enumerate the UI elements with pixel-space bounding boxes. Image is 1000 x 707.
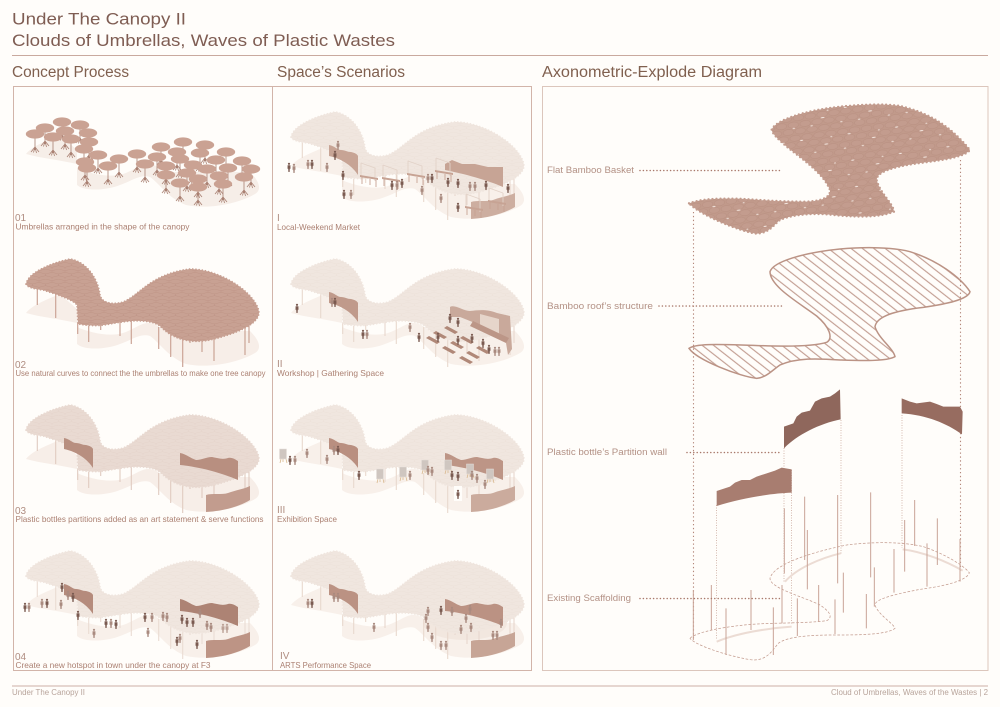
canopy with partitions xyxy=(26,405,259,513)
canopy with people xyxy=(26,551,259,659)
panel: scenarios frame xyxy=(272,86,532,670)
caption III: III xyxy=(277,505,285,516)
people xyxy=(24,583,228,649)
caption II: II xyxy=(277,359,283,370)
caption IV: ARTS Performance Space xyxy=(280,660,371,670)
caption III xyxy=(277,505,337,524)
caption 04 xyxy=(15,652,211,670)
wall front left xyxy=(717,468,792,506)
canopy drawing xyxy=(291,405,524,513)
canopy drawing xyxy=(291,112,524,220)
people xyxy=(306,593,502,650)
label: Plastic bottle's Partition wall: Plastic bottle’s Partition wall xyxy=(547,447,667,458)
label: Existing Scaffolding: Existing Scaffolding xyxy=(547,593,631,604)
caption IV: IV xyxy=(280,651,290,662)
easels xyxy=(280,449,494,501)
heading: Space's Scenarios: Space’s Scenarios xyxy=(277,64,405,81)
axon: existing scaffolding xyxy=(690,492,969,660)
poles xyxy=(693,492,960,655)
caption 03: 03 xyxy=(15,506,27,517)
wall back centre xyxy=(784,389,841,448)
title: Under The Canopy II xyxy=(12,10,186,28)
caption 04: 04 xyxy=(15,652,27,663)
canopy drawing xyxy=(291,551,524,659)
canopy drawing xyxy=(26,259,259,367)
caption IV xyxy=(280,651,371,670)
caption 02: Use natural curves to connect the the umbrellas to make one tree canopy xyxy=(16,368,266,378)
concept step 03: plastic partitions xyxy=(15,405,264,524)
caption II xyxy=(277,359,384,378)
people xyxy=(296,298,500,356)
caption I xyxy=(277,213,361,232)
people xyxy=(288,446,486,499)
caption 03: Plastic bottles partitions added as an art statement & serve functions xyxy=(16,514,264,524)
scenario I: market xyxy=(277,112,524,232)
canopy drawing xyxy=(291,259,524,367)
caption 04: Create a new hotspot in town under the canopy at F3 xyxy=(16,660,211,670)
label: Bamboo roof's structure: Bamboo roof’s structure xyxy=(547,301,653,312)
title xyxy=(12,10,395,50)
caption 03 xyxy=(15,506,264,524)
caption III: Exhibition Space xyxy=(277,514,337,524)
footer right: Cloud of Umbrellas, Waves of the Wastes | 2 xyxy=(831,688,989,697)
caption 01 xyxy=(15,213,190,232)
concept step 02: solid canopy xyxy=(15,259,266,378)
panel: concept process frame xyxy=(14,86,272,670)
axon: bamboo roof structure layer xyxy=(689,248,970,378)
scenario IV: performance xyxy=(280,551,524,670)
dashed ground outline xyxy=(690,543,969,660)
caption I: Local-Weekend Market xyxy=(277,222,361,232)
scenario II: workshop xyxy=(277,259,524,378)
concept step 01: umbrellas xyxy=(15,117,260,232)
heading: Concept Process: Concept Process xyxy=(12,64,129,81)
heading: Axonometric-Explode Diagram: Axonometric-Explode Diagram xyxy=(542,64,762,81)
label: Flat Bamboo Basket: Flat Bamboo Basket xyxy=(547,165,634,176)
people xyxy=(288,141,510,212)
axon: flat bamboo basket layer xyxy=(689,105,970,234)
footer left: Under The Canopy II xyxy=(12,688,85,697)
umbrella cluster xyxy=(26,117,260,206)
axon: vertical projection guides xyxy=(694,160,960,640)
benches xyxy=(426,326,490,364)
panel: axonometric frame xyxy=(542,86,988,670)
wall back right xyxy=(902,398,963,434)
caption 01: Umbrellas arranged in the shape of the canopy xyxy=(16,222,190,232)
caption 01: 01 xyxy=(15,213,27,224)
caption I: I xyxy=(277,213,280,224)
title: Clouds of Umbrellas, Waves of Plastic Wastes xyxy=(12,31,395,50)
caption 02: 02 xyxy=(15,360,27,371)
umbrella floor outline xyxy=(26,135,259,207)
market stalls xyxy=(360,158,506,218)
caption 02 xyxy=(15,360,266,378)
pale wall footprints xyxy=(717,549,963,642)
axon: plastic bottle partition walls xyxy=(717,389,963,506)
scenario III: exhibition xyxy=(277,405,524,524)
caption II: Workshop | Gathering Space xyxy=(277,368,384,378)
concept step 04: hotspot xyxy=(15,551,259,670)
